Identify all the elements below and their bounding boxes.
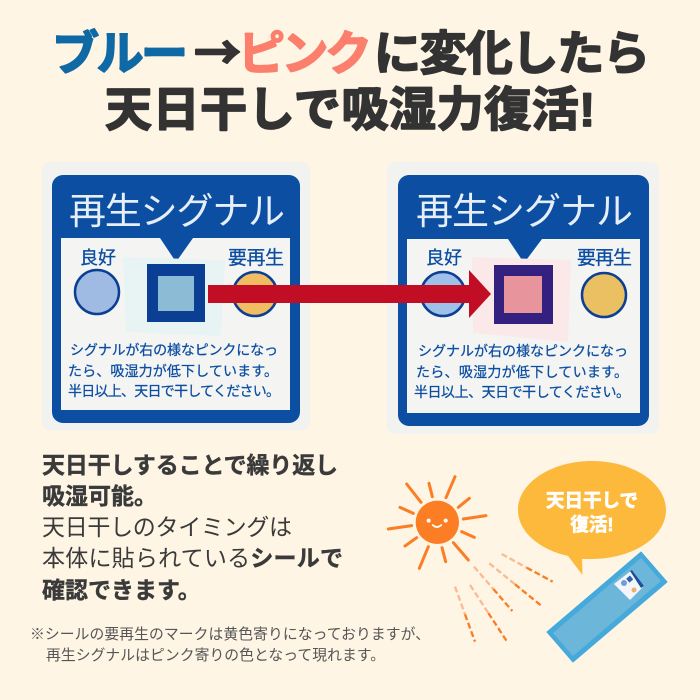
text block: description: 確認できます。 [42,577,201,603]
icon: needs regeneration orange circle [233,272,277,316]
label: good: 良好 [80,248,116,268]
text block: description: 吸湿可能。 [42,483,157,509]
icon: good blue circle [75,270,119,314]
speech bubble: 天日干しで [546,490,638,511]
sticker instructions [68,342,280,399]
speech bubble [518,461,666,575]
icon: needs regeneration orange circle [582,273,626,317]
panel: signal sticker blue state [42,162,310,430]
text block: description [42,452,343,603]
label: needs regeneration: 要再生 [228,247,284,269]
arrow: blue to pink [208,270,491,318]
sticker instructions: シグナルが右の様なピンクになっ [70,342,278,358]
title: ピンク [238,27,372,80]
panel: signal sticker pink state [387,162,659,434]
sun rays dashed [455,554,553,642]
product: blue desiccant pack [547,552,667,662]
title: → [194,15,241,84]
text block: description: 天日干しのタイミングは [42,514,292,540]
sticker instructions [414,343,630,400]
sticker instructions: たら、吸湿力が低下しています。 [68,363,278,379]
text block: description: 本体に貼られているシールで [42,545,343,571]
speech bubble: 復活! [570,514,614,535]
label: needs regeneration: 要再生 [577,247,632,269]
product label [614,570,644,600]
title: 天日干しで吸湿力復活! [105,83,595,136]
text block: description: 天日干しすることで繰り返し [42,452,338,478]
indicator patch blue [123,257,225,336]
title: に変化したら [374,27,650,80]
indicator patch pink [472,257,571,342]
sticker heading: 再生シグナル [69,191,285,232]
footnote: 再生シグナルはピンク寄りの色となって現れます。 [46,647,385,664]
sticker heading: 再生シグナル [416,191,633,232]
icon: smiling sun [388,477,486,568]
footnote [30,626,430,664]
sticker instructions: シグナルが右の様なピンクになっ [418,343,628,359]
title: ブルー [52,27,188,80]
sticker instructions: たら、吸湿力が低下しています。 [416,364,628,380]
sticker instructions: 半日以上、天日で干してください。 [68,383,280,399]
title [52,15,650,136]
label: good: 良好 [426,248,462,268]
footnote: ※シールの要再生のマークは黄色寄りになっておりますが、 [30,626,430,643]
icon: good blue circle [421,272,465,316]
sticker instructions: 半日以上、天日で干してください。 [414,384,630,400]
